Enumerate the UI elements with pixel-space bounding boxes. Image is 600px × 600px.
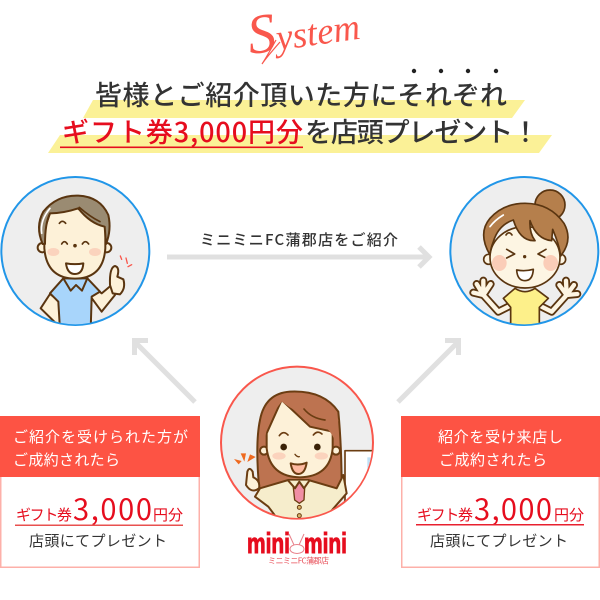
header text: 紹介を受け来店し	[438, 426, 563, 447]
logo word: mini	[247, 528, 290, 560]
reward amount	[16, 487, 183, 529]
arrow: man to friend	[167, 247, 429, 267]
reward amount	[417, 487, 584, 529]
header text	[13, 426, 188, 470]
reward note: 店頭にてプレゼント	[430, 530, 568, 551]
reward amount: ギフト券	[417, 504, 473, 525]
header text: ご成約されたら	[13, 449, 120, 470]
logo word: mini	[304, 528, 347, 560]
reward underline	[15, 524, 183, 526]
logo caption: ミニミニFC蒲郡店	[268, 556, 329, 566]
reward amount: ギフト券	[16, 504, 72, 525]
title	[48, 74, 552, 153]
header text: ご紹介を受けられた方が	[13, 426, 188, 447]
panel header	[0, 416, 200, 477]
reward amount: 円分	[153, 504, 183, 525]
icon: shop staff woman in circle	[221, 367, 381, 520]
yellow highlight line 2	[48, 135, 552, 153]
arrow: shop to friend	[398, 340, 458, 402]
red underline	[60, 146, 303, 148]
panel header	[401, 416, 600, 477]
title line 2 red: ギフト券3,000円分	[62, 111, 303, 150]
spark marks	[234, 453, 256, 464]
logo rabbit	[289, 534, 304, 554]
reward amount: 3,000	[73, 487, 152, 529]
logo: mini mini	[247, 528, 347, 566]
reward note: 店頭にてプレゼント	[29, 530, 167, 551]
panel: right reward	[401, 416, 600, 567]
yellow highlight line 1	[83, 100, 525, 118]
header text: ご成約されたら	[439, 449, 547, 470]
reward amount: 円分	[554, 504, 584, 525]
reward amount: 3,000	[474, 487, 552, 529]
icon: man customer in circle	[1, 177, 149, 330]
script heading: System: System	[243, 0, 363, 67]
title line 2 dark: を店頭プレゼント！	[305, 111, 539, 150]
logo word	[247, 528, 347, 560]
emphasis dots	[412, 69, 498, 73]
title line 1: 皆様とご紹介頂いた方にそれぞれ	[95, 74, 507, 113]
arrow: shop to man	[134, 340, 195, 402]
panel: left reward	[0, 416, 200, 567]
reward underline	[416, 524, 584, 526]
header text	[438, 426, 563, 470]
icon: woman friend in circle	[450, 177, 598, 330]
arrow label: ミニミニFC蒲郡店をご紹介	[200, 229, 398, 250]
